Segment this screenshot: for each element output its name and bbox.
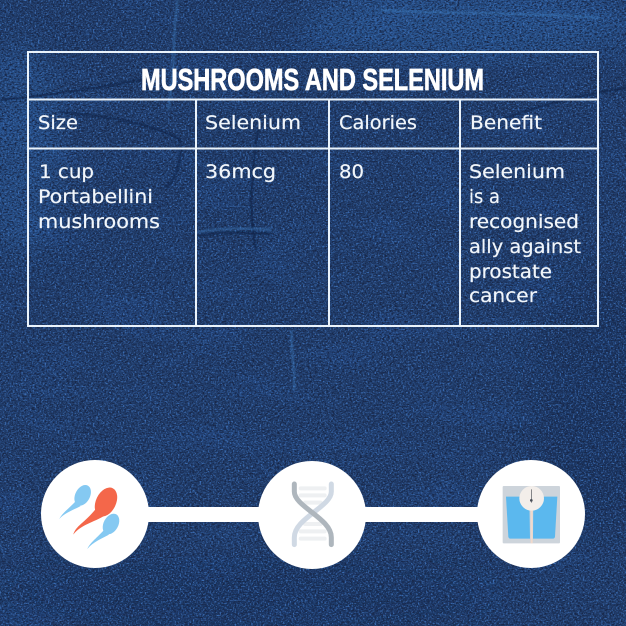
title: MUSHROOMS AND SELENIUM	[141, 62, 484, 97]
selenium cell: 36mcg	[205, 161, 276, 183]
header row: Calories	[339, 112, 417, 134]
size cell: 1 cup	[39, 161, 94, 183]
size cell	[38, 161, 160, 233]
benefit cell: Selenium	[469, 161, 565, 183]
benefit cell	[469, 161, 581, 307]
icon: DNA helix	[258, 461, 366, 569]
benefit cell: cancer	[469, 285, 537, 307]
benefit cell: ally against	[469, 236, 581, 258]
benefit cell: recognised	[469, 211, 579, 233]
icon: sperm cells	[41, 460, 149, 568]
connector bar	[95, 507, 531, 522]
header row: Selenium	[205, 112, 301, 134]
table	[28, 52, 598, 326]
benefit cell: prostate	[469, 261, 552, 283]
table grid	[28, 52, 598, 326]
header row: Size	[38, 112, 78, 134]
calories cell: 80	[339, 161, 364, 183]
benefit cell: is a	[469, 186, 500, 208]
icon: weighing scale	[477, 460, 585, 568]
header row	[38, 112, 542, 134]
size cell: Portabellini	[38, 186, 153, 208]
size cell: mushrooms	[38, 211, 160, 233]
header row: Benefit	[470, 112, 542, 134]
